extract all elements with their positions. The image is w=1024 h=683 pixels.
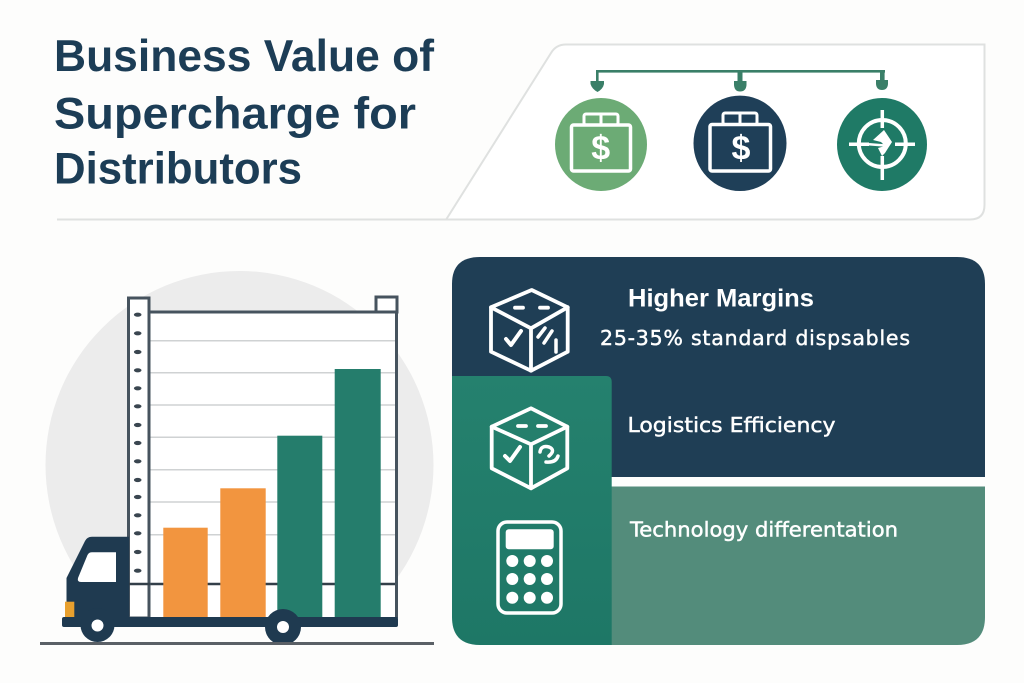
icon: calculator <box>498 522 561 613</box>
icon: cube one <box>491 290 568 371</box>
background circle <box>46 271 434 576</box>
panel outline <box>57 44 984 220</box>
text: margin detail: 25-35% standard dispsables <box>600 326 910 350</box>
heading: logistics efficiency: Logistics Efficiency <box>628 413 836 437</box>
heading: technology differentiation: Technology differentation <box>629 518 898 542</box>
heading: higher margins: Higher Margins <box>628 284 814 312</box>
title <box>54 32 434 194</box>
chart: truck carrying bar chart <box>40 271 434 659</box>
icon: cube two <box>492 408 567 488</box>
title: Business Value of <box>54 32 434 81</box>
teal column <box>452 376 612 645</box>
panel: benefits <box>452 257 985 645</box>
truck <box>62 537 398 645</box>
bars <box>163 369 381 618</box>
light green block <box>600 486 985 645</box>
navy block <box>452 257 985 477</box>
icon: green briefcase with dollar <box>555 98 647 191</box>
icon: teal target <box>837 98 927 191</box>
icon: green briefcase with dollar: $ <box>591 130 610 168</box>
title: Distributors <box>54 144 302 194</box>
corner box <box>376 297 397 312</box>
ground line <box>40 642 434 645</box>
ruler <box>128 298 150 618</box>
title: Supercharge for <box>54 90 416 138</box>
chart board <box>150 312 397 618</box>
icon: navy briefcase with dollar: $ <box>732 130 751 168</box>
panel: value icons <box>57 44 984 220</box>
icon: navy briefcase with dollar <box>694 96 786 191</box>
connector arrows <box>590 70 888 92</box>
